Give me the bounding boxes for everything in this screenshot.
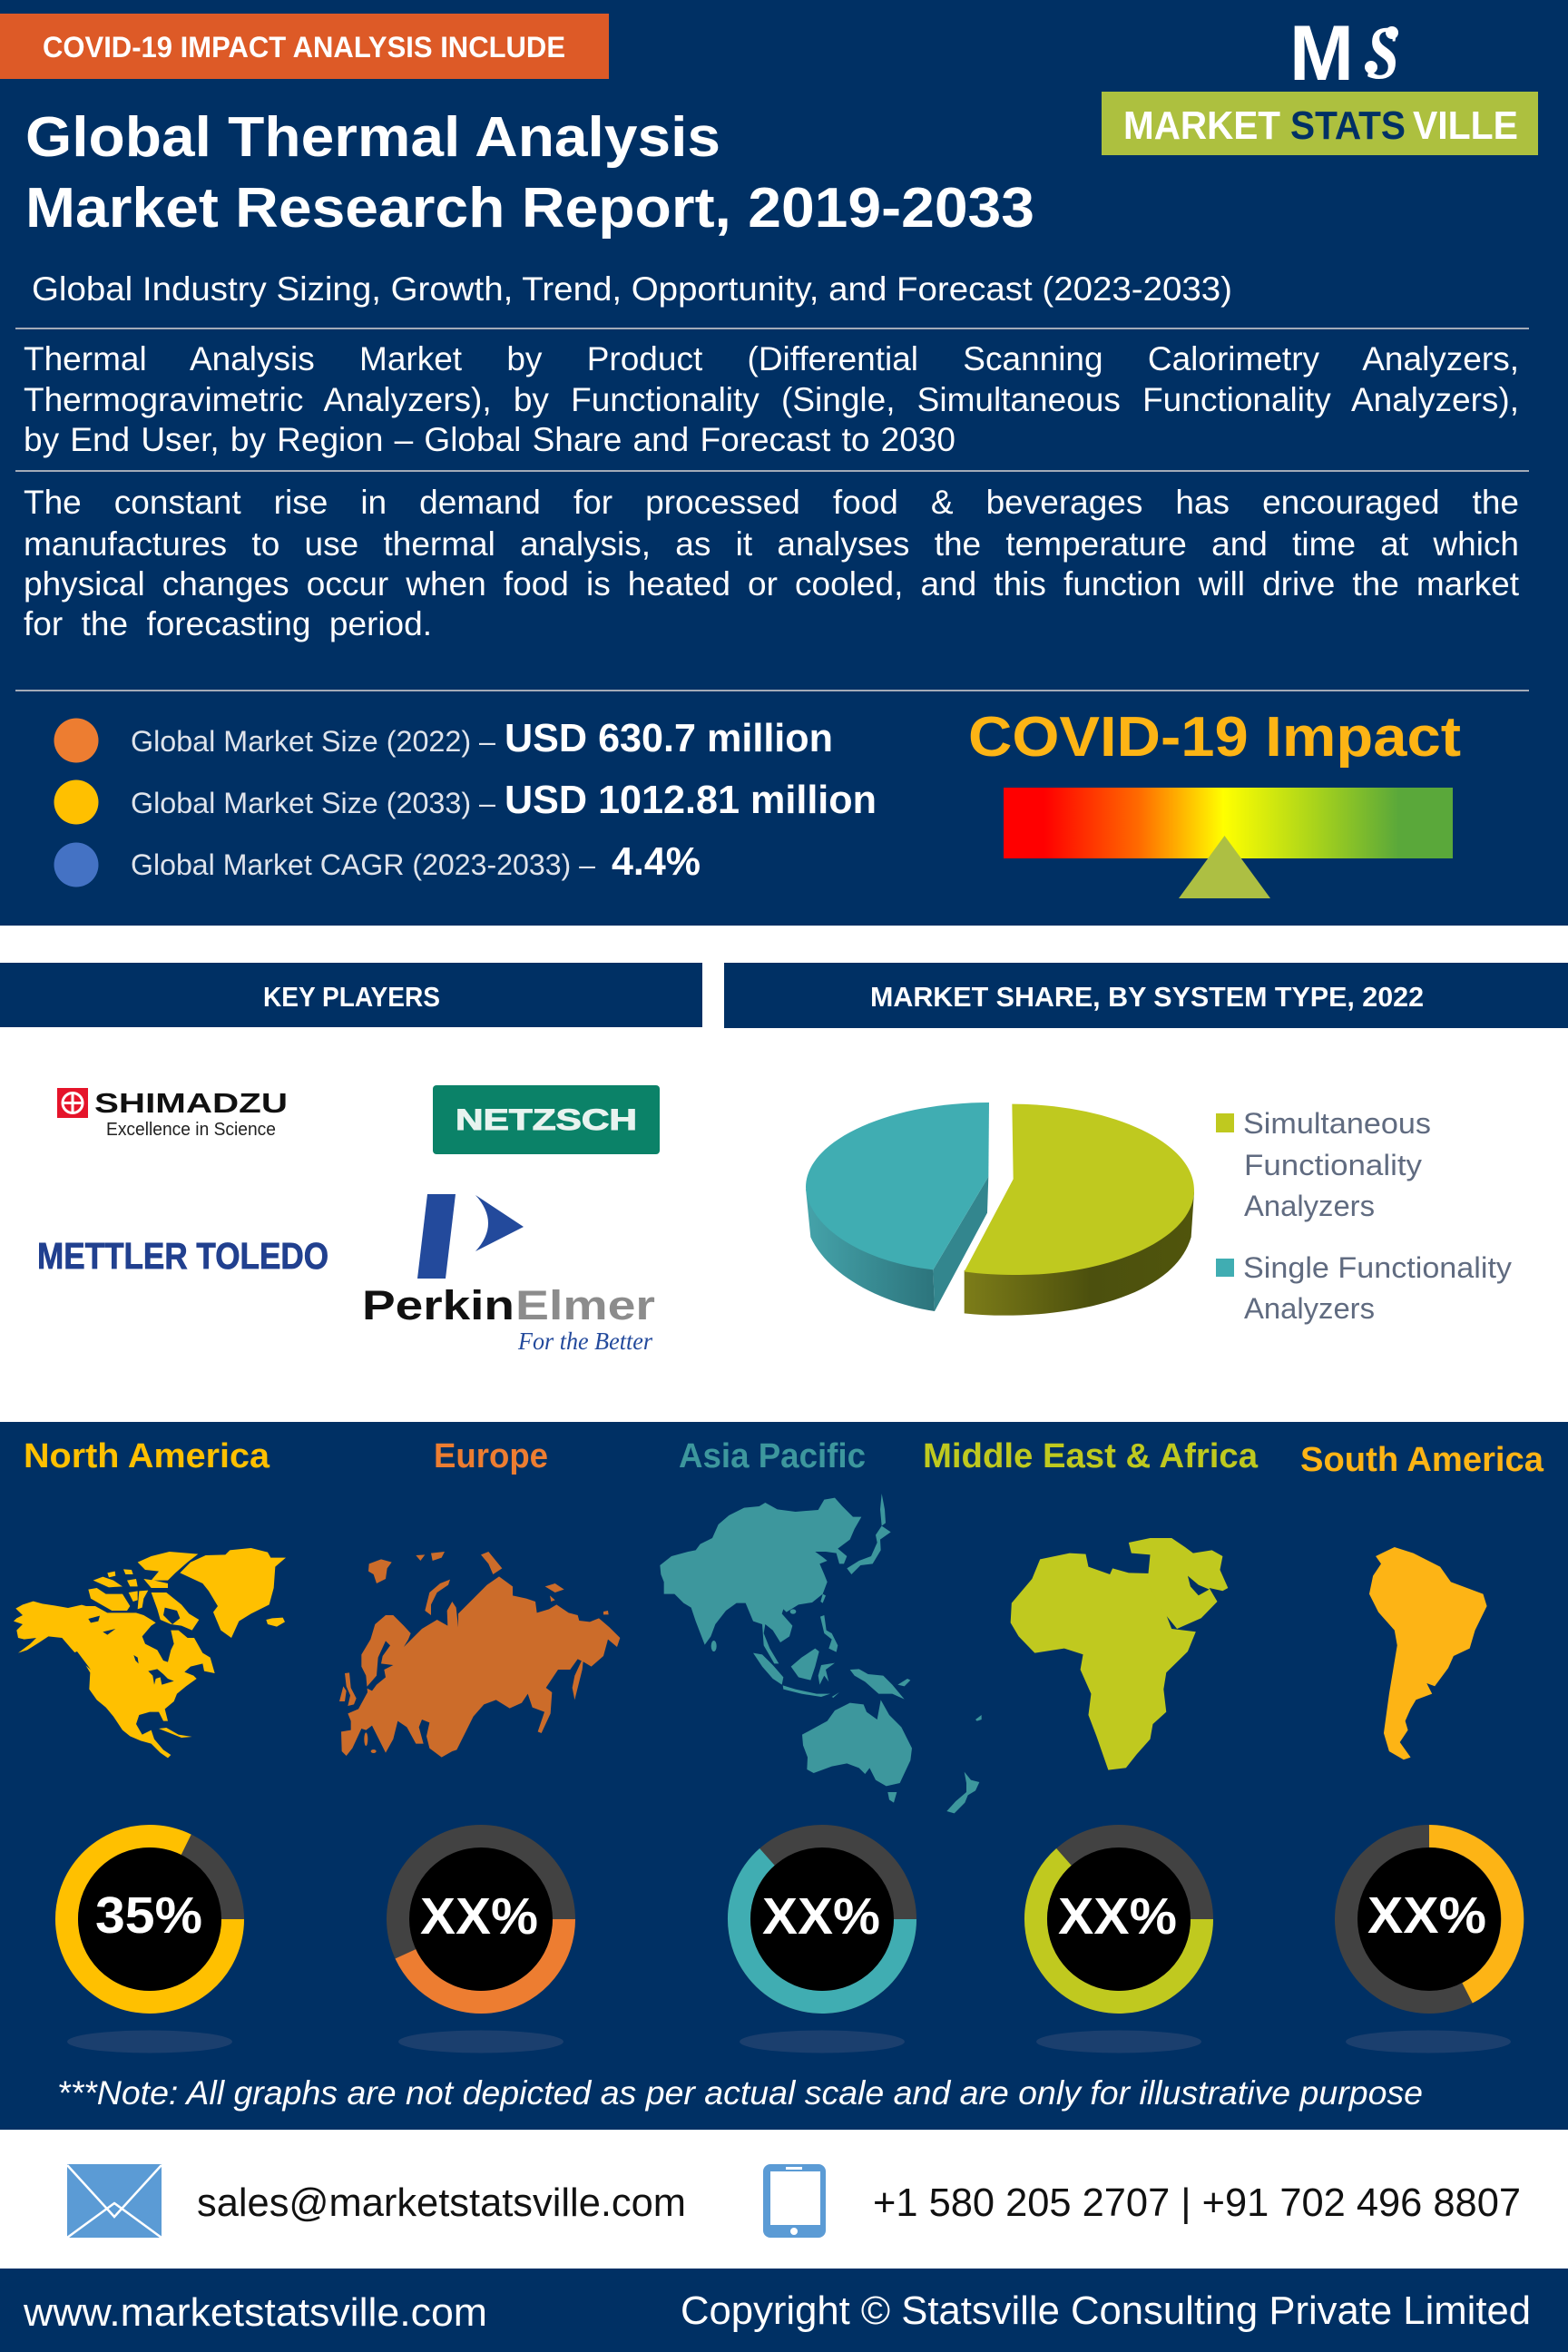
covid-19 impact gauge: COVID-19 Impact xyxy=(968,706,1461,769)
text: physical changes occur when food is heated or cooled, and this function will drive the market xyxy=(24,565,1519,603)
note: ***Note: All graphs are not depicted as per actual scale and are only for illustrative purpose xyxy=(57,2074,1423,2112)
heading: key players: KEY PLAYERS xyxy=(263,981,440,1013)
market stats list xyxy=(54,716,877,887)
logo: shimadzu: Excellence in Science xyxy=(106,1120,276,1140)
donut: south america: XX% xyxy=(1367,1886,1486,1945)
contact email: sales@marketstatsville.com xyxy=(197,2180,686,2225)
logo: shimadzu: SHIMADZU xyxy=(94,1087,288,1119)
text: for the forecasting period. xyxy=(24,605,432,642)
chart legend xyxy=(1216,1107,1512,1325)
donut: south america xyxy=(1335,1825,1524,2053)
logo: perkinelmer: Elmer xyxy=(515,1282,655,1328)
text block: market driver xyxy=(24,484,1519,642)
donut: asia pacific xyxy=(728,1825,916,2053)
stat: market size 2022 xyxy=(54,716,833,762)
map: north america xyxy=(14,1548,286,1758)
title: Global Thermal Analysis xyxy=(25,106,720,169)
stat: market size 2033: Global Market Size (2033) – xyxy=(131,787,495,819)
logo: perkinelmer: Perkin xyxy=(362,1282,514,1328)
chart legend: Analyzers xyxy=(1244,1190,1375,1222)
region labels: North America xyxy=(24,1437,270,1475)
map: south america xyxy=(1369,1547,1487,1759)
donut: north america 35% xyxy=(55,1825,244,2053)
donut: europe xyxy=(387,1825,575,2053)
text: manufactures to use thermal analysis, as it analyses the temperature and time at which xyxy=(24,525,1519,563)
stat: cagr: Global Market CAGR (2023-2033) – xyxy=(131,848,595,881)
covid-19 impact gauge xyxy=(968,706,1461,898)
region labels: Middle East & Africa xyxy=(923,1437,1259,1475)
text: by End User, by Region – Global Share and Forecast to 2030 xyxy=(24,421,956,458)
logo: market stats ville: M xyxy=(1289,10,1354,97)
panel: regions background xyxy=(0,1422,1568,2130)
text: Thermogravimetric Analyzers), by Functionality (Single, Simultaneous Functionality Analyzers), xyxy=(24,381,1519,418)
heading: market share: MARKET SHARE, BY SYSTEM TYPE, 2022 xyxy=(870,981,1424,1013)
title: Market Research Report, 2019-2033 xyxy=(25,177,1034,240)
contact phone numbers: +1 580 205 2707 | +91 702 496 8807 xyxy=(873,2180,1521,2225)
logo: netzsch: NETZSCH xyxy=(456,1103,637,1136)
logo: netzsch xyxy=(433,1085,660,1154)
banner: covid-19 impact: COVID-19 IMPACT ANALYSIS INCLUDE xyxy=(43,31,565,64)
chart legend: Single Functionality xyxy=(1243,1251,1512,1284)
logo: perkinelmer: For the Better xyxy=(517,1328,652,1355)
map: middle east and africa xyxy=(1011,1538,1228,1770)
donut: middle east and africa: XX% xyxy=(1058,1887,1177,1945)
panel: footer xyxy=(0,2269,1568,2352)
icon: phone xyxy=(763,2164,826,2238)
stat: market size 2033: USD 1012.81 million xyxy=(505,778,877,822)
donut: north america 35%: 35% xyxy=(95,1886,202,1945)
region labels xyxy=(24,1437,1544,1479)
heading: key players xyxy=(0,963,702,1027)
slice: single functionality xyxy=(806,1102,989,1311)
text block: market scope xyxy=(24,340,1519,458)
subtitle: Global Industry Sizing, Growth, Trend, Opportunity, and Forecast (2023-2033) xyxy=(32,270,1232,308)
icon: envelope xyxy=(67,2164,162,2238)
heading: market share xyxy=(724,963,1568,1028)
stat: cagr xyxy=(54,839,701,887)
map: europe xyxy=(339,1552,620,1758)
logo: market stats ville: MARKET xyxy=(1123,103,1280,148)
region labels: Europe xyxy=(434,1437,548,1475)
banner: covid-19 impact xyxy=(0,14,609,79)
chart legend: Analyzers xyxy=(1244,1292,1375,1325)
footer copyright: Copyright © Statsville Consulting Private Limited xyxy=(681,2288,1531,2333)
logo: shimadzu xyxy=(57,1087,288,1140)
donut: middle east and africa xyxy=(1024,1825,1213,2053)
text: The constant rise in demand for processed food & beverages has encouraged the xyxy=(24,484,1519,521)
logo: mettler toledo: METTLER TOLEDO xyxy=(37,1235,328,1277)
text: Thermal Analysis Market by Product (Differential Scanning Calorimetry Analyzers, xyxy=(24,340,1519,377)
logo: market stats ville xyxy=(1102,10,1538,155)
stat: cagr: 4.4% xyxy=(612,839,701,884)
stat: market size 2022: Global Market Size (2022) – xyxy=(131,725,495,758)
footer website: www.marketstatsville.com xyxy=(23,2290,487,2335)
region labels: Asia Pacific xyxy=(679,1437,866,1475)
logo: market stats ville: S xyxy=(1367,11,1399,95)
logo: perkinelmer xyxy=(362,1194,655,1355)
logo: market stats ville: VILLE xyxy=(1413,103,1518,148)
title xyxy=(25,106,1034,240)
donut: europe: XX% xyxy=(420,1887,538,1945)
map: asia pacific xyxy=(660,1494,982,1813)
chart: market share 3d pie xyxy=(806,1102,1194,1316)
chart legend: Simultaneous xyxy=(1243,1107,1431,1140)
panel: header background xyxy=(0,0,1568,926)
slice: simultaneous functionality xyxy=(965,1104,1194,1316)
region labels: South America xyxy=(1300,1441,1544,1479)
donut: asia pacific: XX% xyxy=(762,1887,880,1945)
logo: market stats ville: STATS xyxy=(1290,103,1406,148)
stat: market size 2033 xyxy=(54,778,877,824)
stat: market size 2022: USD 630.7 million xyxy=(505,716,833,760)
chart legend: Functionality xyxy=(1244,1149,1422,1181)
